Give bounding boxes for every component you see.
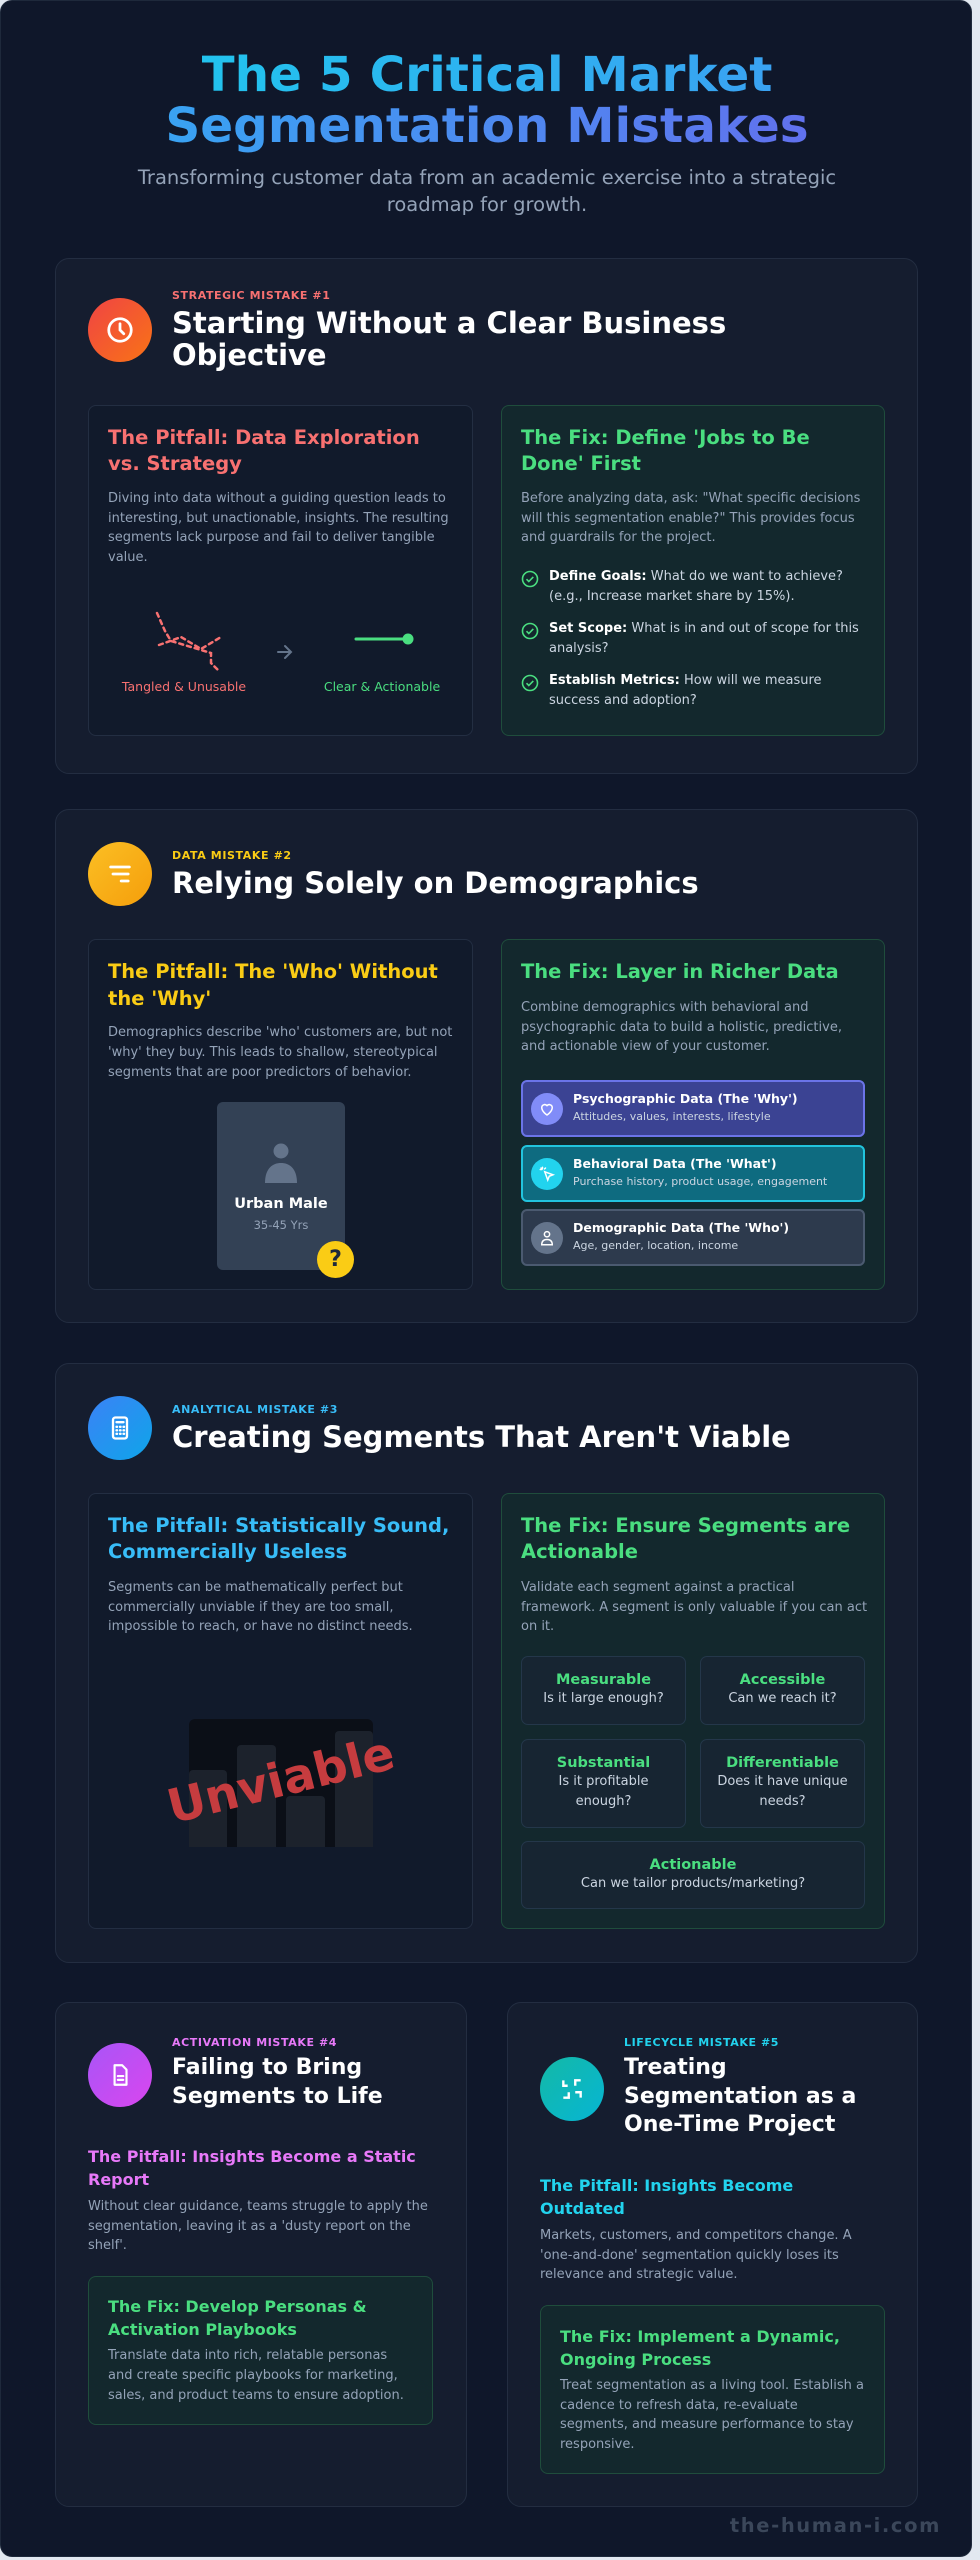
check item: scope: Set Scope: What is in and out of scope for this xyxy=(549,621,859,636)
fix 3 heading xyxy=(521,1514,850,1563)
criterion: actionable: Actionable xyxy=(650,1857,736,1873)
criterion: accessible: Can we reach it? xyxy=(728,1691,837,1706)
pitfall 4 text: segmentation, leaving it as a 'dusty report on the xyxy=(88,2218,411,2234)
panel: fix 4 xyxy=(88,2276,433,2425)
layer: psychographic xyxy=(521,1080,865,1137)
criterion: differentiable: needs? xyxy=(759,1794,806,1808)
icon: document xyxy=(88,2043,152,2107)
check item: goals: (e.g., Increase market share by 15%). xyxy=(549,588,795,604)
panel: fix 5 xyxy=(540,2305,885,2474)
panel: fix 1 xyxy=(501,405,885,736)
illustration: tangled vs clear: Tangled & Unusable xyxy=(121,679,246,694)
heading: mistake 5: One-Time Project xyxy=(624,2112,835,2137)
pitfall 2 heading: the 'Why' xyxy=(108,986,211,1010)
fix 3 text: framework. A segment is only valuable if you can act xyxy=(521,1600,867,1614)
pitfall 1 text: Diving into data without a guiding question leads to xyxy=(108,491,446,506)
title: Segmentation Mistakes xyxy=(165,98,809,154)
pitfall 3 text: Segments can be mathematically perfect but xyxy=(108,1580,403,1595)
panel: mistake 3 xyxy=(55,1363,918,1963)
fix 2 text: and actionable view of your customer. xyxy=(521,1039,770,1054)
layer: psychographic: Attitudes, values, interests, lifestyle xyxy=(573,1110,771,1123)
criterion: accessible xyxy=(700,1656,865,1725)
pitfall 3 text: impossible to reach, or have no distinct needs. xyxy=(108,1619,413,1634)
label: strategic mistake: STRATEGIC MISTAKE #1 xyxy=(172,289,330,302)
checklist xyxy=(522,569,859,708)
subtitle: roadmap for growth. xyxy=(387,193,587,216)
pitfall 4 text xyxy=(88,2199,428,2253)
icon: clock xyxy=(88,298,152,362)
fix 4 text xyxy=(108,2348,404,2403)
fix 4 heading xyxy=(108,2297,367,2338)
fix 2 heading: The Fix: Layer in Richer Data xyxy=(521,960,839,983)
heading: mistake 5 xyxy=(624,2055,856,2137)
label: activation mistake: ACTIVATION MISTAKE #4 xyxy=(172,2036,337,2049)
heading: mistake 1 xyxy=(172,306,726,372)
pitfall 1 text: interesting, but unactionable, insights. The resulting xyxy=(108,510,449,526)
pitfall 4 text: Without clear guidance, teams struggle to apply the xyxy=(88,2199,428,2214)
criterion: substantial xyxy=(521,1739,686,1828)
heading: mistake 2: Relying Solely on Demographics xyxy=(172,866,699,900)
fix 5 text: Treat segmentation as a living tool. Establish a xyxy=(560,2378,864,2393)
pitfall 1 text xyxy=(108,491,449,564)
heading: mistake 1: Objective xyxy=(172,338,327,372)
criterion: substantial: Substantial xyxy=(557,1755,650,1771)
pitfall 1 text: value. xyxy=(108,550,148,564)
heading: mistake 4: Segments to Life xyxy=(172,2084,383,2109)
fix 5 heading xyxy=(560,2327,840,2369)
pitfall 1 text: segments lack purpose and fail to deliver tangible xyxy=(108,530,435,545)
check item: metrics: success and adoption? xyxy=(549,692,697,708)
pitfall 3 heading xyxy=(108,1514,449,1563)
fix 5 heading: Ongoing Process xyxy=(560,2350,711,2369)
layer: behavioral: Behavioral Data (The 'What') xyxy=(573,1156,777,1171)
criterion: substantial: enough? xyxy=(576,1794,631,1808)
pitfall 2 text xyxy=(108,1025,452,1080)
heading: mistake 5: Segmentation as a xyxy=(624,2084,856,2109)
fix 1 text: will this segmentation enable?" This provides focus xyxy=(521,510,855,526)
check item: scope: analysis? xyxy=(549,640,609,656)
icon: refresh corners xyxy=(540,2057,604,2121)
criterion: differentiable xyxy=(700,1739,865,1828)
fix 4 text: Translate data into rich, relatable personas xyxy=(108,2348,387,2363)
icon: question badge xyxy=(317,1241,354,1278)
fix 5 text: responsive. xyxy=(560,2436,634,2452)
fix 4 heading: The Fix: Develop Personas & xyxy=(108,2297,367,2316)
illustration: tangled vs clear xyxy=(121,612,440,694)
persona card: Urban Male xyxy=(234,1196,328,1212)
fix 5 heading: The Fix: Implement a Dynamic, xyxy=(560,2327,840,2346)
panel: pitfall 3 xyxy=(88,1493,473,1929)
title: The 5 Critical Market xyxy=(202,47,772,103)
pitfall 4 heading xyxy=(88,2147,416,2189)
fix 3 text: on it. xyxy=(521,1619,554,1634)
fix 5 text: segments, and measure performance to stay xyxy=(560,2417,854,2432)
stamp: unviable: Unviable xyxy=(162,1726,400,1835)
pitfall 3 heading: The Pitfall: Statistically Sound, xyxy=(108,1514,449,1537)
fix 2 text: psychographic data to build a holistic, predictive, xyxy=(521,1020,842,1034)
fix 3 heading: The Fix: Ensure Segments are xyxy=(521,1514,850,1537)
panel: pitfall 1 xyxy=(88,405,473,736)
heading: mistake 4: Failing to Bring xyxy=(172,2055,362,2080)
criterion: actionable: Can we tailor products/marketing? xyxy=(581,1876,805,1891)
pitfall 2 text: Demographics describe 'who' customers are, but not xyxy=(108,1025,452,1040)
fix 5 text: cadence to refresh data, re-evaluate xyxy=(560,2398,798,2412)
panel: pitfall 2 xyxy=(88,939,473,1290)
panel: mistake 1 xyxy=(55,258,918,774)
fix 5 text xyxy=(560,2378,864,2452)
heading: mistake 1: Starting Without a Clear Business xyxy=(172,306,726,340)
fix 4 heading: Activation Playbooks xyxy=(108,2320,297,2338)
panel: mistake 4 xyxy=(55,2002,467,2507)
pitfall 3 text xyxy=(108,1580,413,1634)
title xyxy=(165,47,809,154)
layer: demographic xyxy=(521,1209,865,1266)
check item: metrics: Establish Metrics: How will we measure xyxy=(549,673,822,688)
fix 2 text: Combine demographics with behavioral and xyxy=(521,1000,808,1015)
icon: calculator xyxy=(88,1396,152,1460)
fix 3 text xyxy=(521,1580,867,1634)
criterion: differentiable: Differentiable xyxy=(726,1755,839,1771)
layer: demographic: Age, gender, location, income xyxy=(573,1239,738,1252)
layer: psychographic: Psychographic Data (The 'Why') xyxy=(573,1091,798,1106)
fix 3 heading: Actionable xyxy=(521,1540,638,1563)
criterion: measurable: Measurable xyxy=(556,1672,651,1688)
pitfall 4 text: shelf'. xyxy=(88,2238,127,2253)
persona card: 35-45 Yrs xyxy=(254,1218,308,1232)
subtitle xyxy=(138,166,836,216)
pitfall 5 text: relevance and strategic value. xyxy=(540,2267,738,2282)
heading: mistake 3: Creating Segments That Aren't Viable xyxy=(172,1420,791,1454)
pitfall 2 text: segments that are poor predictors of behavior. xyxy=(108,1065,412,1080)
pitfall 5 text: Markets, customers, and competitors change. A xyxy=(540,2228,852,2243)
criterion: differentiable: Does it have unique xyxy=(717,1774,848,1789)
criterion: substantial: Is it profitable xyxy=(559,1774,648,1789)
pitfall 5 text xyxy=(540,2228,852,2282)
panel: fix 3 xyxy=(501,1493,885,1929)
fix 4 text: and create specific playbooks for marketing, xyxy=(108,2368,398,2383)
panel: fix 2 xyxy=(501,939,885,1290)
fix 1 text xyxy=(521,491,860,545)
pitfall 5 text: 'one-and-done' segmentation quickly loses its xyxy=(540,2248,839,2262)
chart: unviable bars xyxy=(189,1719,373,1847)
pitfall 5 heading: The Pitfall: Insights Become xyxy=(540,2176,793,2195)
criterion: measurable xyxy=(521,1656,686,1725)
pitfall 2 heading xyxy=(108,960,438,1010)
label: analytical mistake: ANALYTICAL MISTAKE #3 xyxy=(172,1403,338,1416)
footer: website: the-human-i.com xyxy=(730,2514,941,2537)
fix 1 heading: The Fix: Define 'Jobs to Be xyxy=(521,426,810,449)
heading: mistake 4 xyxy=(172,2055,383,2109)
check item: scope xyxy=(522,621,859,656)
layer: behavioral: Purchase history, product usage, engagement xyxy=(573,1175,827,1188)
pitfall 3 heading: Commercially Useless xyxy=(108,1540,347,1563)
fix 1 heading xyxy=(521,426,810,474)
fix 2 text xyxy=(521,1000,842,1054)
check item: metrics xyxy=(522,673,822,708)
subtitle: Transforming customer data from an academic exercise into a strategic xyxy=(138,166,836,189)
persona card xyxy=(217,1102,345,1270)
pitfall 1 heading: vs. Strategy xyxy=(108,452,242,474)
illustration: tangled vs clear: Clear & Actionable xyxy=(324,679,440,694)
pitfall 5 heading: Outdated xyxy=(540,2199,625,2218)
pitfall 2 heading: The Pitfall: The 'Who' Without xyxy=(108,960,438,983)
layer: behavioral xyxy=(521,1145,865,1202)
criterion: actionable xyxy=(521,1841,865,1909)
label: lifecycle mistake: LIFECYCLE MISTAKE #5 xyxy=(624,2036,779,2049)
pitfall 1 heading xyxy=(108,426,420,474)
pitfall 1 heading: The Pitfall: Data Exploration xyxy=(108,426,420,449)
check item: goals xyxy=(522,569,843,604)
fix 3 text: Validate each segment against a practical xyxy=(521,1580,794,1595)
criterion: measurable: Is it large enough? xyxy=(543,1691,664,1706)
icon: person xyxy=(265,1144,297,1183)
fix 4 text: sales, and product teams to ensure adoption. xyxy=(108,2388,404,2403)
fix 1 heading: Done' First xyxy=(521,452,641,474)
label: data mistake: DATA MISTAKE #2 xyxy=(172,849,292,862)
icon: question badge: ? xyxy=(329,1247,342,1272)
pitfall 3 text: commercially unviable if they are too small, xyxy=(108,1600,394,1614)
fix 1 text: Before analyzing data, ask: "What specific decisions xyxy=(521,491,860,506)
panel: mistake 2 xyxy=(55,809,918,1323)
heading: mistake 5: Treating xyxy=(624,2055,727,2080)
check item: goals: Define Goals: What do we want to achieve? xyxy=(549,569,843,584)
layer: demographic: Demographic Data (The 'Who') xyxy=(573,1220,789,1235)
pitfall 2 text: 'why' they buy. This leads to shallow, stereotypical xyxy=(108,1045,438,1060)
panel: mistake 5 xyxy=(507,2002,918,2507)
icon: filter lines xyxy=(88,842,152,906)
pitfall 5 heading xyxy=(540,2176,793,2218)
criterion: accessible: Accessible xyxy=(740,1672,825,1688)
fix 1 text: and guardrails for the project. xyxy=(521,530,716,545)
pitfall 4 heading: The Pitfall: Insights Become a Static xyxy=(88,2147,416,2166)
pitfall 4 heading: Report xyxy=(88,2170,149,2189)
